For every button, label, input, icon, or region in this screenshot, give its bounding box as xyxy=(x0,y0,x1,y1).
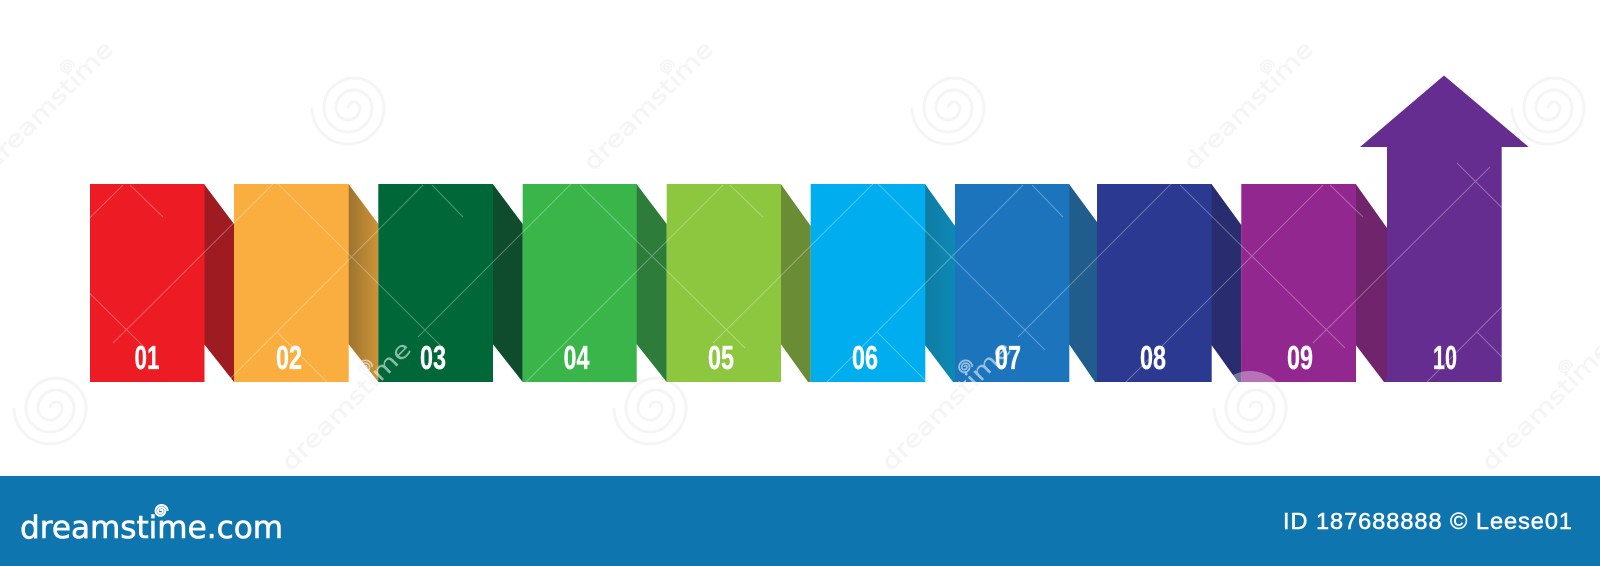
watermark on white background: dreamstime xyxy=(579,36,719,176)
number 06: 06 xyxy=(852,339,878,376)
watermark overlay on coloured blocks: dreamstime xyxy=(277,336,417,476)
watermark on white background: dreamstime xyxy=(1477,336,1600,476)
step 07 blue block xyxy=(955,184,1097,382)
number 01: 01 xyxy=(134,339,160,376)
number 02: 02 xyxy=(276,339,302,376)
footer image id and credit: ID 187688888 © Leese01 xyxy=(1283,508,1572,534)
watermark on white background xyxy=(0,36,1600,476)
number 08: 08 xyxy=(1140,339,1166,376)
number 07: 07 xyxy=(995,339,1021,376)
watermark on white background: dreamstime xyxy=(1179,36,1319,176)
number 09: 09 xyxy=(1287,339,1313,376)
watermark overlay on coloured blocks xyxy=(90,162,1502,382)
footer bar xyxy=(0,476,1600,566)
step 03 dark green block xyxy=(378,184,523,382)
watermark on white background: dreamstime xyxy=(877,336,1017,476)
step 04 green block xyxy=(523,184,667,382)
number 04: 04 xyxy=(564,339,590,376)
step 02 orange block xyxy=(234,184,378,382)
step 06 cyan block xyxy=(811,184,955,382)
watermark overlay on coloured blocks: dreamstime xyxy=(877,336,1017,476)
number 05: 05 xyxy=(708,339,734,376)
watermark on white background: dreamstime xyxy=(277,336,417,476)
step 08 navy block xyxy=(1097,184,1241,382)
step numbers xyxy=(134,339,1457,376)
footer logo: dreamstime.com xyxy=(20,510,283,546)
step 05 lime block xyxy=(667,184,811,382)
step 10 purple arrow xyxy=(1360,76,1529,382)
number 03: 03 xyxy=(420,339,446,376)
step 01 red block xyxy=(90,184,234,382)
step 09 magenta block xyxy=(1241,184,1387,382)
icon: logo spiral xyxy=(156,505,168,516)
number 10: 10 xyxy=(1433,339,1457,376)
